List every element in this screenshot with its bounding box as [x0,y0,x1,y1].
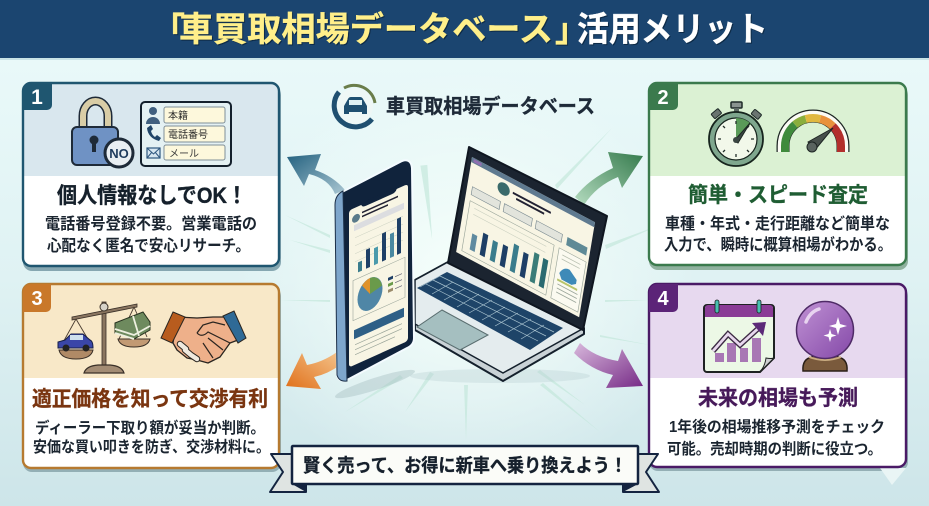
phone screen content [349,182,408,367]
number tab 4: 4 [657,288,669,310]
header band [0,0,929,60]
body text 3: 安価な買い叩きを防ぎ、交渉材料に。 [33,437,270,456]
panel 3: fair price [23,284,281,472]
heading 1: 個人情報なしでOK！ [57,183,247,208]
icon: handshake [161,311,246,363]
laptop base [415,262,584,381]
title: 「 [152,11,185,48]
laptop screen content [456,157,595,317]
laptop lid [448,147,607,330]
number tab 2 [649,83,678,110]
body text 4 [667,417,885,458]
icon: car logo [334,85,375,127]
body text 1 [45,214,257,255]
icon: padlock with NO badge: NO [109,146,129,161]
illustration: laptop [410,147,607,383]
body text 1: 心配なく匿名で安心リサーチ。 [47,236,250,255]
body text 4: 1年後の相場推移予測をチェック [669,417,885,436]
heading 4: 未来の相場も予測 [698,387,858,410]
heading 3: 適正価格を知って交渉有利 [32,388,268,411]
heading 2: 簡単・スピード査定 [688,184,868,207]
logo: site name [334,85,595,127]
bottom ribbon banner [270,446,659,492]
icon: speedometer gauge [783,116,843,152]
number tab 3: 3 [31,288,43,310]
body text 2 [664,214,892,254]
trackpad [417,310,488,350]
central glow with radial rays [235,70,695,490]
body text 1: 電話番号登録不要。営業電話の [45,214,257,233]
title: 活用メリット [577,11,768,49]
icon: contact form [141,102,231,166]
number tab 3 [23,284,51,312]
arrow: to panel 3 [286,352,340,389]
icon: contact form: 本籍 [168,109,188,122]
title: 」 [555,11,588,48]
body text 3 [33,418,270,456]
ribbon right tail [623,454,659,492]
number tab 1 [23,83,52,110]
illustration: smartphone [333,160,417,403]
icon: stopwatch [709,102,763,166]
icon: contact form: メール [169,149,199,160]
site name text: 車買取相場データベース [386,94,595,118]
arrow: to panel 2 [575,152,643,205]
number tab 1: 1 [31,86,43,109]
number tab 2: 2 [657,87,669,109]
icon: contact form: 電話番号 [168,129,208,141]
icon: balance scale with car and money [58,302,150,373]
ribbon left tail [270,454,306,492]
arrow: to panel 1 [287,154,345,194]
ribbon main face [292,446,638,484]
body text 2: 入力で、瞬時に概算相場がわかる。 [664,235,892,254]
icon: calendar with rising chart [704,300,774,372]
body text 2: 車種・年式・走行距離など簡単な [665,214,890,233]
panel 1: personal info [23,83,281,271]
title: 車買取相場データベース [179,10,553,49]
number tab 4 [649,284,678,312]
panel 2: quick appraisal [649,83,908,270]
panel 4: future forecast [649,284,908,485]
title [152,10,768,49]
body text 3: ディーラー下取り額が妥当か判断。 [35,418,265,437]
icon: padlock with NO badge [72,101,133,167]
body text 4: 可能。売却時期の判断に役立つ。 [667,439,882,458]
slogan: 賢く売って、お得に新車へ乗り換えよう！ [303,455,627,476]
arrow: to panel 4 [574,343,643,388]
keyboard [417,272,563,350]
icon: crystal ball [796,302,854,371]
